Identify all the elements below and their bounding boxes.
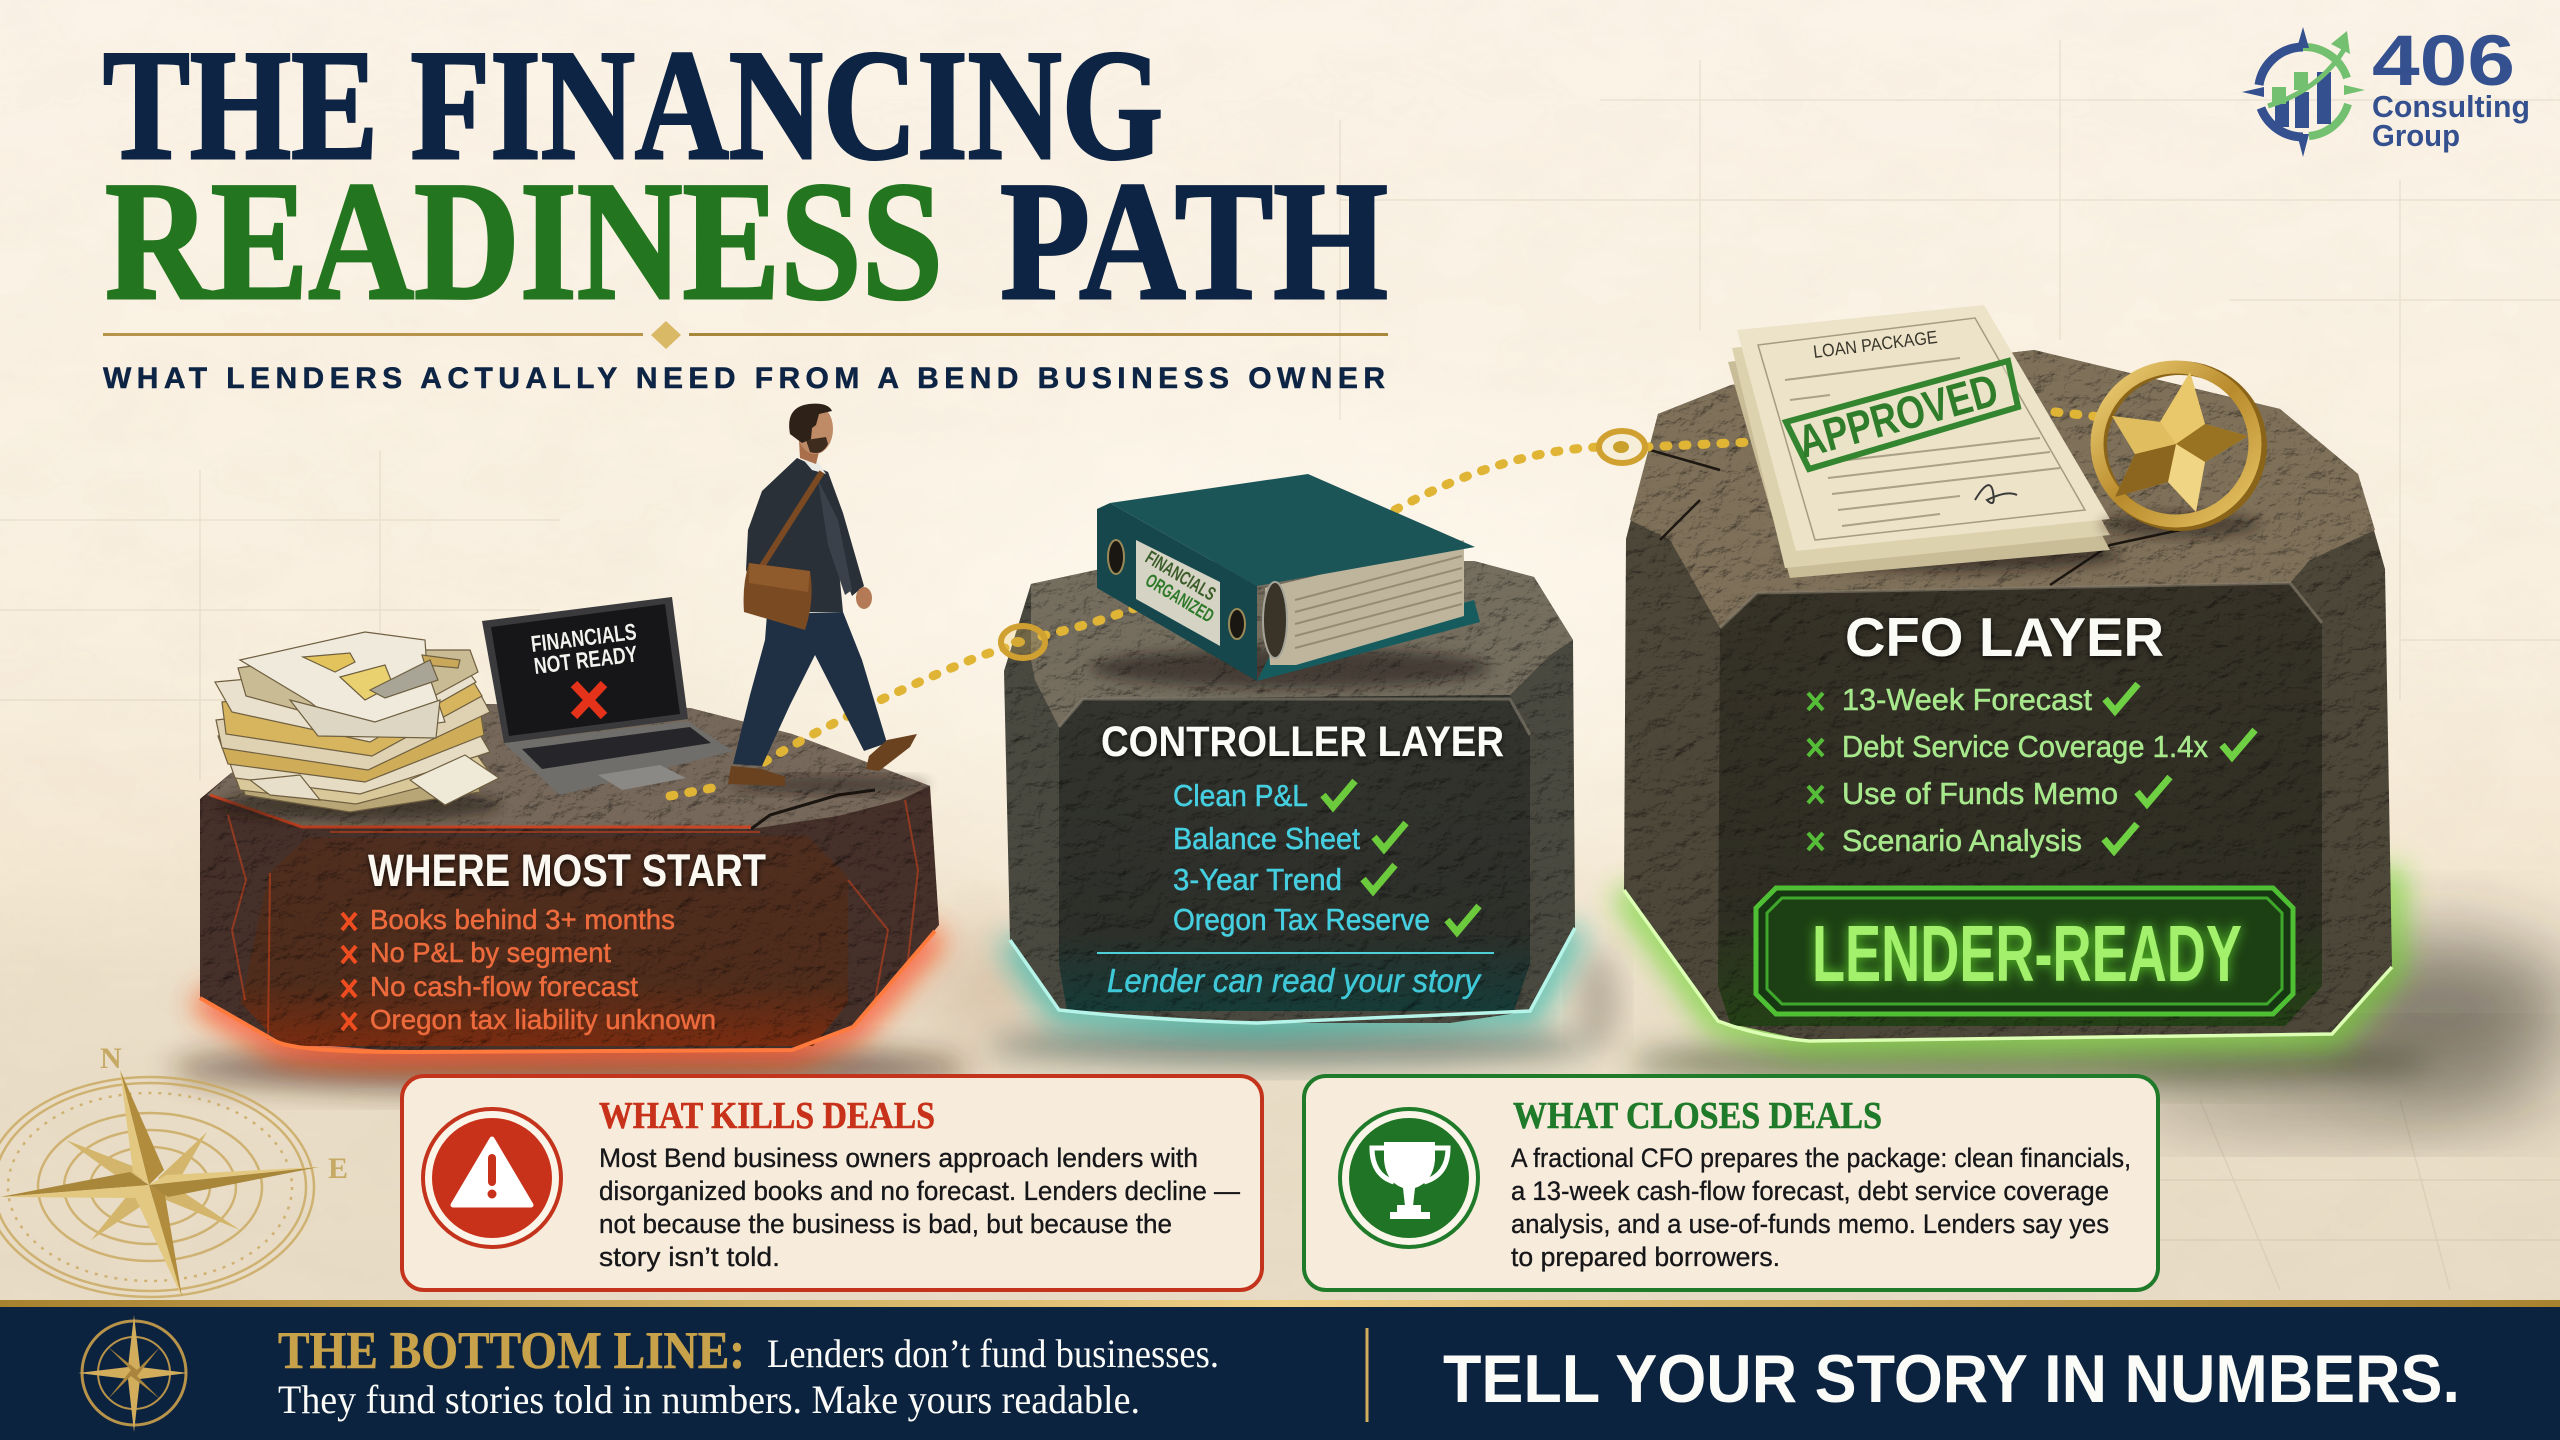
text: the bottom line: Lenders don’t fund businesses. xyxy=(767,1331,1219,1376)
list: controller items: Clean P&L xyxy=(1173,778,1308,813)
green glow base xyxy=(1624,867,2392,1041)
icon: trophy xyxy=(1340,1109,1478,1247)
icon: messy paper stack xyxy=(215,632,500,821)
body text: disorganized books and no forecast. Lenders decline — xyxy=(599,1176,1240,1206)
body text: a 13-week cash-flow forecast, debt service coverage xyxy=(1511,1176,2109,1206)
title: READINESS xyxy=(105,147,943,335)
jacket xyxy=(746,458,864,612)
stone top surface xyxy=(207,704,930,829)
stone top surface xyxy=(1630,350,2375,628)
icon: approved loan package: LOAN PACKAGE xyxy=(1812,327,1939,362)
lava cracks xyxy=(228,800,918,1040)
list: failures xyxy=(342,904,716,1035)
divider xyxy=(1097,952,1494,954)
icon: approved loan package xyxy=(1728,305,2120,578)
body text: analysis, and a use-of-funds memo. Lenders say yes xyxy=(1511,1209,2109,1239)
icon: approved loan package: APPROVED xyxy=(1792,363,2003,468)
list: failures: No P&L by segment xyxy=(370,937,611,968)
icon: laptop financials not ready xyxy=(482,597,733,795)
list: failures: Books behind 3+ months xyxy=(370,904,675,935)
title: WHAT KILLS DEALS xyxy=(599,1095,935,1137)
badge: lender-ready: LENDER-READY xyxy=(1812,909,2242,998)
stone front face xyxy=(1718,583,2322,1026)
compass rose: lower left xyxy=(0,1042,348,1297)
hand xyxy=(856,587,872,609)
panel: cfo layer plinth xyxy=(1624,350,2392,1041)
heading: where most start: WHERE MOST START xyxy=(368,845,766,896)
list: cfo items: Scenario Analysis xyxy=(1842,823,2082,858)
compass rose: lower left: N xyxy=(100,1042,122,1075)
body text: story isn’t told. xyxy=(599,1242,780,1272)
glow edge line xyxy=(200,931,935,1052)
title rule with diamond xyxy=(103,321,1388,349)
stone body xyxy=(1624,350,2392,1041)
list: cfo items: Use of Funds Memo xyxy=(1842,776,2118,811)
waypoint ring: controller xyxy=(1001,626,1045,658)
waypoint ring: cfo xyxy=(1599,431,1645,463)
list: controller items: Balance Sheet xyxy=(1173,821,1360,856)
stone front face xyxy=(241,836,848,1046)
compass rose: lower left: E xyxy=(328,1152,348,1185)
subtitle: WHAT LENDERS ACTUALLY NEED FROM A BEND BUSINESS OWNER xyxy=(103,362,1385,395)
body text xyxy=(1511,1143,2131,1272)
hair xyxy=(789,404,832,443)
card: what kills deals xyxy=(402,1076,1262,1290)
body text: Most Bend business owners approach lenders with xyxy=(599,1143,1198,1173)
red glow base xyxy=(200,931,935,1052)
head xyxy=(797,404,833,454)
messenger bag xyxy=(744,563,812,630)
title: PATH xyxy=(1000,147,1388,335)
glow edge line xyxy=(1624,890,2392,1041)
panel: where most start plinth xyxy=(200,704,939,1052)
title: WHAT CLOSES DEALS xyxy=(1513,1095,1882,1137)
logo: 406 consulting group: Consulting xyxy=(2372,89,2530,124)
body text: not because the business is bad, but because the xyxy=(599,1209,1172,1239)
neck xyxy=(799,440,820,464)
icon: gold star medal xyxy=(2097,367,2260,537)
figure: businessman walking xyxy=(728,404,930,793)
list: cfo items: 13-Week Forecast xyxy=(1842,682,2092,717)
logo: 406 consulting group xyxy=(2242,22,2530,157)
icon: teal binder xyxy=(1090,474,1490,688)
text: call to action: TELL YOUR STORY IN NUMBERS. xyxy=(1443,1341,2460,1417)
heading: controller layer: CONTROLLER LAYER xyxy=(1101,718,1504,766)
list: cfo items xyxy=(1808,682,2255,858)
list: controller items xyxy=(1173,778,1479,937)
bottom banner xyxy=(0,1300,2560,1440)
logo: 406 consulting group: Group xyxy=(2372,118,2460,153)
badge: lender-ready xyxy=(1756,888,2293,1014)
body text: to prepared borrowers. xyxy=(1511,1242,1780,1272)
title xyxy=(103,18,1388,335)
stone body xyxy=(200,704,939,1052)
stone body xyxy=(1004,561,1575,1023)
icon: teal binder: ORGANIZED xyxy=(1141,570,1217,627)
icon: banner compass xyxy=(78,1315,188,1432)
body text xyxy=(599,1143,1240,1272)
list: cfo items: Debt Service Coverage 1.4x xyxy=(1842,729,2208,764)
tagline: Lender can read your story xyxy=(1107,962,1482,999)
list: controller items: 3-Year Trend xyxy=(1173,862,1342,897)
panel: controller layer plinth xyxy=(1004,561,1575,1023)
glow edge line xyxy=(1010,928,1575,1023)
logo mark xyxy=(2242,27,2365,157)
teal glow base xyxy=(1010,928,1575,1023)
floor shadows around plinths xyxy=(170,935,2560,1121)
front shoe xyxy=(866,734,917,771)
icon: laptop financials not ready: NOT READY xyxy=(532,640,639,679)
title: THE FINANCING xyxy=(103,18,1163,193)
list: failures: No cash-flow forecast xyxy=(370,971,638,1002)
icon: laptop financials not ready: FINANCIALS xyxy=(529,618,638,657)
rear leg and front leg xyxy=(733,612,887,766)
list: failures: Oregon tax liability unknown xyxy=(370,1004,716,1035)
stone front face xyxy=(1059,695,1530,1011)
icon: warning xyxy=(423,1109,561,1247)
list: controller items: Oregon Tax Reserve xyxy=(1173,902,1430,937)
text: the bottom line: THE BOTTOM LINE: xyxy=(278,1322,745,1380)
icon: teal binder: FINANCIALS xyxy=(1141,547,1219,605)
text: the bottom line xyxy=(278,1322,1219,1422)
body text: A fractional CFO prepares the package: clean financials, xyxy=(1511,1143,2131,1173)
heading: cfo layer: CFO LAYER xyxy=(1845,606,2164,668)
card: what closes deals xyxy=(1304,1076,2158,1290)
rear shoe xyxy=(728,766,785,786)
strap xyxy=(757,472,822,574)
shirt collar xyxy=(800,456,826,474)
path: gold dotted route xyxy=(670,412,2110,796)
stone top surface xyxy=(1031,561,1573,727)
text: the bottom line: They fund stories told in numbers. Make yours readable. xyxy=(278,1377,1140,1422)
logo text: 406 xyxy=(2372,22,2515,101)
